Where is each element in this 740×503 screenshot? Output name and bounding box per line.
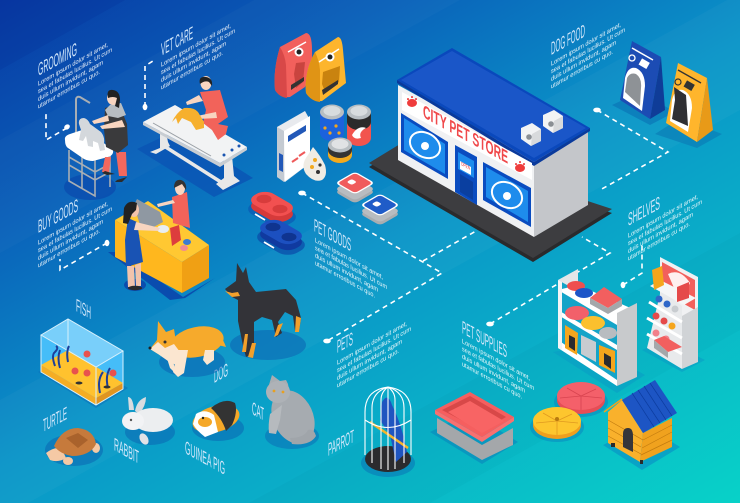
connector lines: [46, 61, 668, 343]
text block: pet supplies: utamur erroribus cu quo.: [462, 360, 522, 401]
pet food trays: [335, 172, 400, 226]
text block: vet care: [161, 19, 235, 92]
text block: grooming: sea et fabulas lucilius. Ut cum: [38, 46, 112, 95]
text block: pets: Lorem ipsum dolor sit amet,: [337, 320, 407, 367]
text block: dog food: Lorem ipsum dolor sit amet,: [551, 21, 621, 68]
text: PET SUPPLIES: [462, 318, 507, 362]
text block: shelves: utamur erroribus cu quo.: [628, 220, 690, 263]
text: PARROT: [328, 427, 354, 461]
text block: grooming: Lorem ipsum dolor sit amet,: [38, 41, 108, 88]
text block: pet supplies: duis ullum invidunt, agam: [462, 353, 525, 395]
text block: pet supplies: [462, 337, 534, 407]
text block: vet care: duis ullum invidunt, agam: [161, 40, 226, 84]
text: TURTLE: [43, 404, 67, 437]
text block: pet goods: sea et fabulas lucilius. Ut cum: [315, 244, 387, 291]
text block: grooming: duis ullum invidunt, agam: [38, 59, 103, 103]
text block: pet goods: duis ullum invidunt, agam: [315, 252, 378, 294]
shelf unit: display stand: [642, 257, 705, 372]
text block: shelves: sea et fabulas lucilius. Ut cum: [628, 198, 702, 247]
text block: vet care: Lorem ipsum dolor sit amet,: [161, 22, 231, 69]
rabbit: [122, 397, 175, 446]
turtle: [45, 428, 103, 466]
store: city pet store: [369, 48, 612, 262]
store: city pet store: CITY PET STORE: [423, 102, 508, 168]
text: BUY GOODS: [38, 196, 78, 238]
text: DOG: [214, 360, 228, 388]
grooming scene: [64, 90, 128, 200]
text block: pet supplies: sea et fabulas lucilius. Ut cum: [462, 345, 534, 392]
parrot cage: [361, 387, 415, 477]
vet care scene: [137, 76, 253, 197]
litter box: [430, 392, 518, 464]
text block: pets: sea et fabulas lucilius. Ut cum: [337, 325, 411, 374]
text block: pets: [337, 317, 411, 390]
pet bowls: [243, 189, 310, 258]
text block: dog food: sea et fabulas lucilius. Ut cum: [551, 26, 625, 75]
pet food bags: [275, 33, 346, 102]
text block: grooming: [38, 38, 112, 111]
text block: vet care: utamur erroribus cu quo.: [161, 49, 223, 92]
shelf unit: pet supplies: [553, 269, 645, 393]
text: FISH: [76, 296, 91, 324]
text: SHELVES: [628, 193, 660, 231]
guinea pig: [189, 400, 244, 441]
text block: buy goods: duis ullum invidunt, agam: [38, 218, 103, 262]
text: PETS: [337, 329, 353, 358]
doberman: [225, 263, 306, 360]
text block: dog food: duis ullum invidunt, agam: [551, 39, 616, 83]
text block: shelves: duis ullum invidunt, agam: [628, 211, 693, 255]
dog food bags: [612, 41, 722, 148]
text block: pet goods: [315, 236, 387, 306]
text: RABBIT: [114, 435, 139, 468]
text block: pets: duis ullum invidunt, agam: [337, 338, 402, 382]
text: PET GOODS: [314, 216, 351, 256]
text block: pet goods: Lorem ipsum dolor sit amet,: [315, 236, 383, 281]
corgi: [148, 321, 227, 377]
text block: shelves: [628, 190, 702, 263]
buy goods scene: [108, 180, 215, 300]
text block: buy goods: utamur erroribus cu quo.: [38, 227, 100, 270]
text block: buy goods: Lorem ipsum dolor sit amet,: [38, 200, 108, 247]
cans and fish food: [277, 104, 371, 182]
text block: pet supplies: Lorem ipsum dolor sit amet,: [462, 337, 530, 382]
text block: dog food: [551, 18, 625, 91]
cat: [263, 375, 323, 451]
cushions: [530, 382, 608, 442]
store: city pet store: OPEN: [461, 161, 470, 172]
aquarium: fish: [38, 319, 128, 408]
text block: grooming: utamur erroribus cu quo.: [38, 68, 100, 111]
text: CAT: [252, 399, 264, 425]
text block: pet goods: utamur erroribus cu quo.: [315, 259, 375, 300]
text block: buy goods: sea et fabulas lucilius. Ut cum: [38, 205, 112, 254]
text block: vet care: sea et fabulas lucilius. Ut cum: [161, 27, 235, 76]
text block: pets: utamur erroribus cu quo.: [337, 347, 399, 390]
text block: shelves: Lorem ipsum dolor sit amet,: [628, 193, 698, 240]
text block: buy goods: [38, 197, 112, 270]
dog house: [603, 380, 680, 470]
text: GROOMING: [38, 40, 77, 81]
text block: dog food: utamur erroribus cu quo.: [551, 48, 613, 91]
